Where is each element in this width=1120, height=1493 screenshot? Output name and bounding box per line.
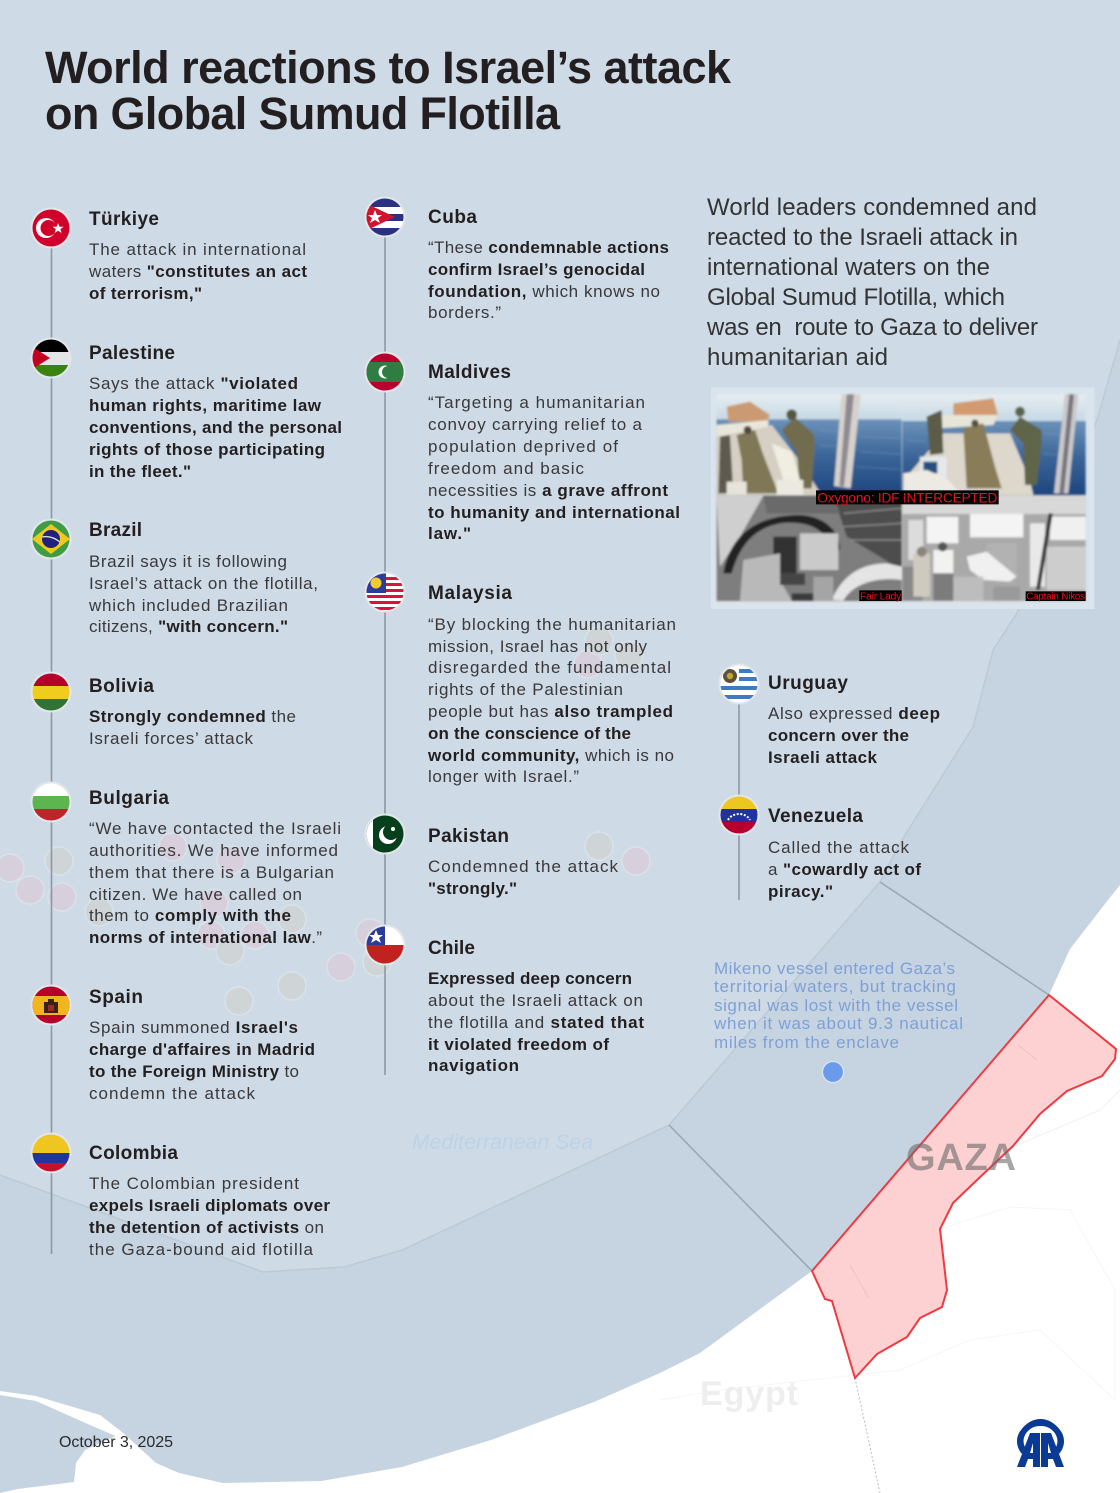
entry: Colombia: The Colombian president <box>89 1174 299 1193</box>
intro text <box>706 194 1038 371</box>
icon: flag of Uruguay <box>718 664 760 704</box>
intro text: international waters on the <box>707 254 990 281</box>
entry: Palestine: rights of those participating <box>89 440 325 459</box>
entry: Maldives: “Targeting a humanitarian <box>428 393 645 412</box>
entry: Cuba: foundation, which knows no <box>428 282 660 301</box>
entry: Bulgaria: them that there is a Bulgarian <box>89 863 334 882</box>
entry: Spain: charge d'affaires in Madrid <box>89 1040 315 1059</box>
entry: Bulgaria: citizen. We have called on <box>89 885 302 904</box>
entry: Chile: navigation <box>428 1056 519 1075</box>
entry: Maldives: to humanity and international <box>428 503 680 522</box>
entry: Colombia: the detention of activists on <box>89 1218 324 1237</box>
entry: Palestine: in the fleet." <box>89 462 191 481</box>
entry: Bulgaria: authorities. We have informed <box>89 841 338 860</box>
entry: Cuba <box>364 196 669 322</box>
icon: flag of Brazil <box>30 518 72 560</box>
entry: Maldives: freedom and basic <box>428 459 584 478</box>
icon: flag of Pakistan <box>364 814 406 854</box>
entry: Malaysia: disregarded the fundamental <box>428 658 671 677</box>
photo caption: Oxygono: Oxygono: IDF INTERCEPTED <box>817 490 997 505</box>
entry: Spain <box>30 984 315 1103</box>
icon: flag of Türkiye <box>30 208 72 248</box>
entry: Chile: Expressed deep concern <box>428 969 632 988</box>
entry: Malaysia: “By blocking the humanitarian <box>428 615 676 634</box>
callout: Mikeno vessel: when it was about 9.3 nautical <box>713 1014 963 1033</box>
callout: Mikeno vessel: miles from the enclave <box>714 1033 899 1052</box>
entry: Bolivia <box>30 672 296 748</box>
entry: Pakistan: "strongly." <box>428 879 517 898</box>
timeline line: column 2 <box>384 230 386 1075</box>
map label: GAZA: GAZA <box>906 1137 1016 1179</box>
icon: flag of Malaysia <box>364 572 406 612</box>
title: World reactions to Israel’s attack <box>45 42 732 93</box>
entry: Uruguay: concern over the <box>768 726 909 745</box>
icon: flag of Cuba <box>364 196 406 238</box>
entry: Malaysia: Malaysia <box>428 583 512 604</box>
callout: Mikeno vessel: signal was lost with the vessel <box>714 996 958 1015</box>
entry: Pakistan: Condemned the attack <box>428 857 618 876</box>
callout: Mikeno vessel: territorial waters, but tracking <box>714 977 956 996</box>
photo: bottom-left night cabin <box>717 496 902 601</box>
entry: Palestine: Says the attack "violated <box>89 374 298 393</box>
entry: Uruguay <box>718 664 940 767</box>
entry: Malaysia: on the conscience of the <box>428 724 631 743</box>
entry: Venezuela <box>718 794 921 901</box>
entry: Uruguay: Also expressed deep <box>768 704 940 723</box>
entry: Chile: the flotilla and stated that <box>428 1013 644 1032</box>
map label: Egypt: Egypt <box>700 1375 798 1413</box>
entry: Malaysia: mission, Israel has not only <box>428 637 648 656</box>
icon: flag of Bulgaria <box>30 782 72 822</box>
intro text: Global Sumud Flotilla, which <box>707 284 1005 311</box>
entry: Maldives: population deprived of <box>428 437 618 456</box>
entry: Türkiye: of terrorism," <box>89 284 202 303</box>
intro text: humanitarian aid <box>707 344 888 371</box>
entry: Bolivia: Strongly condemned the <box>89 707 296 726</box>
icon: flag of Chile <box>364 924 406 966</box>
entry: Maldives <box>364 352 680 543</box>
entry: Venezuela: a "cowardly act of <box>768 860 921 879</box>
entry: Malaysia: longer with Israel.” <box>428 767 579 786</box>
icon: flag of Spain <box>30 984 72 1026</box>
entry: Pakistan: Pakistan <box>428 826 509 847</box>
entry: Venezuela: Venezuela <box>768 806 863 827</box>
entry: Venezuela: Called the attack <box>768 838 910 857</box>
entry: Bulgaria: norms of international law.” <box>89 928 322 947</box>
entry: Colombia <box>30 1132 330 1259</box>
entry: Colombia: expels Israeli diplomats over <box>89 1196 330 1215</box>
map: Gaza strip <box>812 995 1116 1378</box>
decorative vessel dots <box>0 627 650 1015</box>
entry: Maldives: law." <box>428 524 471 543</box>
entry: Malaysia <box>364 572 676 786</box>
intro text: reacted to the Israeli attack in <box>707 224 1018 251</box>
entry: Spain: Spain summoned Israel's <box>89 1018 298 1037</box>
entry: Brazil: citizens, "with concern." <box>89 617 288 636</box>
icon: flag of Palestine <box>30 338 72 378</box>
entry: Colombia: the Gaza-bound aid flotilla <box>89 1240 314 1259</box>
photo: top-right boat <box>902 394 1086 495</box>
entry: Spain: Spain <box>89 987 143 1008</box>
entry: Cuba: Cuba <box>428 207 477 228</box>
title: on Global Sumud Flotilla <box>45 88 561 139</box>
entry: Brazil: Israel’s attack on the flotilla, <box>89 574 318 593</box>
entry: Maldives: Maldives <box>428 362 511 383</box>
map marker: Mikeno vessel position <box>822 1062 844 1082</box>
entry: Palestine <box>30 338 342 481</box>
map: land <box>0 885 1120 1493</box>
map: darker territorial waters <box>0 340 1120 1493</box>
entry: Maldives: convoy carrying relief to a <box>428 415 643 434</box>
entry: Uruguay: Uruguay <box>768 673 848 694</box>
entry: Palestine: Palestine <box>89 343 175 364</box>
entry: Pakistan <box>364 814 618 898</box>
photo: bottom-right cabin <box>902 496 1086 601</box>
callout: Mikeno vessel <box>713 959 963 1052</box>
timeline line: column 1 <box>50 240 52 1254</box>
entry: Palestine: human rights, maritime law <box>89 396 322 415</box>
entry: Colombia: Colombia <box>89 1143 178 1164</box>
entry: Bolivia: Israeli forces’ attack <box>89 729 254 748</box>
entry: Bulgaria <box>30 782 341 947</box>
entry: Brazil: Brazil <box>89 520 142 541</box>
intro text: World leaders condemned and <box>707 194 1037 221</box>
entry: Venezuela: piracy." <box>768 882 833 901</box>
date: October 3, 2025 <box>59 1434 173 1451</box>
intro text: was en route to Gaza to deliver <box>706 314 1038 341</box>
photo caption: Fair Lady: Fair Lady <box>860 591 902 602</box>
entry: Bulgaria: “We have contacted the Israeli <box>89 819 341 838</box>
photo collage <box>711 387 1094 609</box>
icon: flag of Maldives <box>364 352 406 392</box>
entry: Uruguay: Israeli attack <box>768 748 878 767</box>
entry: Malaysia: world community, which is no <box>427 746 674 765</box>
entry: Spain: condemn the attack <box>89 1084 256 1103</box>
entry: Cuba: borders.” <box>428 303 501 322</box>
entry: Chile: about the Israeli attack on <box>428 991 643 1010</box>
icon: flag of Colombia <box>30 1132 72 1174</box>
entry: Maldives: necessities is a grave affront <box>428 481 668 500</box>
entry: Malaysia: rights of the Palestinian <box>428 680 623 699</box>
entry: Cuba: confirm Israel’s genocidal <box>428 260 645 279</box>
entry: Spain: to the Foreign Ministry to <box>89 1062 299 1081</box>
entry: Chile: it violated freedom of <box>428 1035 609 1054</box>
entry: Malaysia: people but has also trampled <box>428 702 673 721</box>
photo: top-left boat <box>717 394 902 495</box>
entry: Türkiye: waters "constitutes an act <box>88 262 307 281</box>
icon: flag of Venezuela <box>718 794 760 836</box>
entry: Bulgaria: Bulgaria <box>89 788 169 809</box>
logo: Anadolu Agency <box>1017 1419 1064 1467</box>
entry: Brazil: which included Brazilian <box>88 596 288 615</box>
entry: Bolivia: Bolivia <box>89 676 154 697</box>
timeline line: column 3 <box>738 700 740 900</box>
icon: flag of Bolivia <box>30 672 72 712</box>
entry: Chile: Chile <box>428 938 475 959</box>
entry: Bulgaria: them to comply with the <box>89 906 291 925</box>
map label: Mediterranean Sea: Mediterranean Sea <box>412 1131 593 1154</box>
entry: Palestine: conventions, and the personal <box>89 418 342 437</box>
entry: Türkiye <box>30 208 307 303</box>
entry: Türkiye: Türkiye <box>89 209 159 230</box>
callout: Mikeno vessel: Mikeno vessel entered Gaza’s <box>714 959 955 978</box>
entry: Brazil: Brazil says it is following <box>89 552 287 571</box>
photo caption: Captain Nikos: Captain Nikos <box>1026 591 1085 602</box>
entry: Cuba: “These condemnable actions <box>428 238 669 257</box>
entry: Türkiye: The attack in international <box>89 240 306 259</box>
title <box>45 42 732 139</box>
entry: Brazil <box>30 518 318 636</box>
entry: Chile <box>364 924 644 1075</box>
